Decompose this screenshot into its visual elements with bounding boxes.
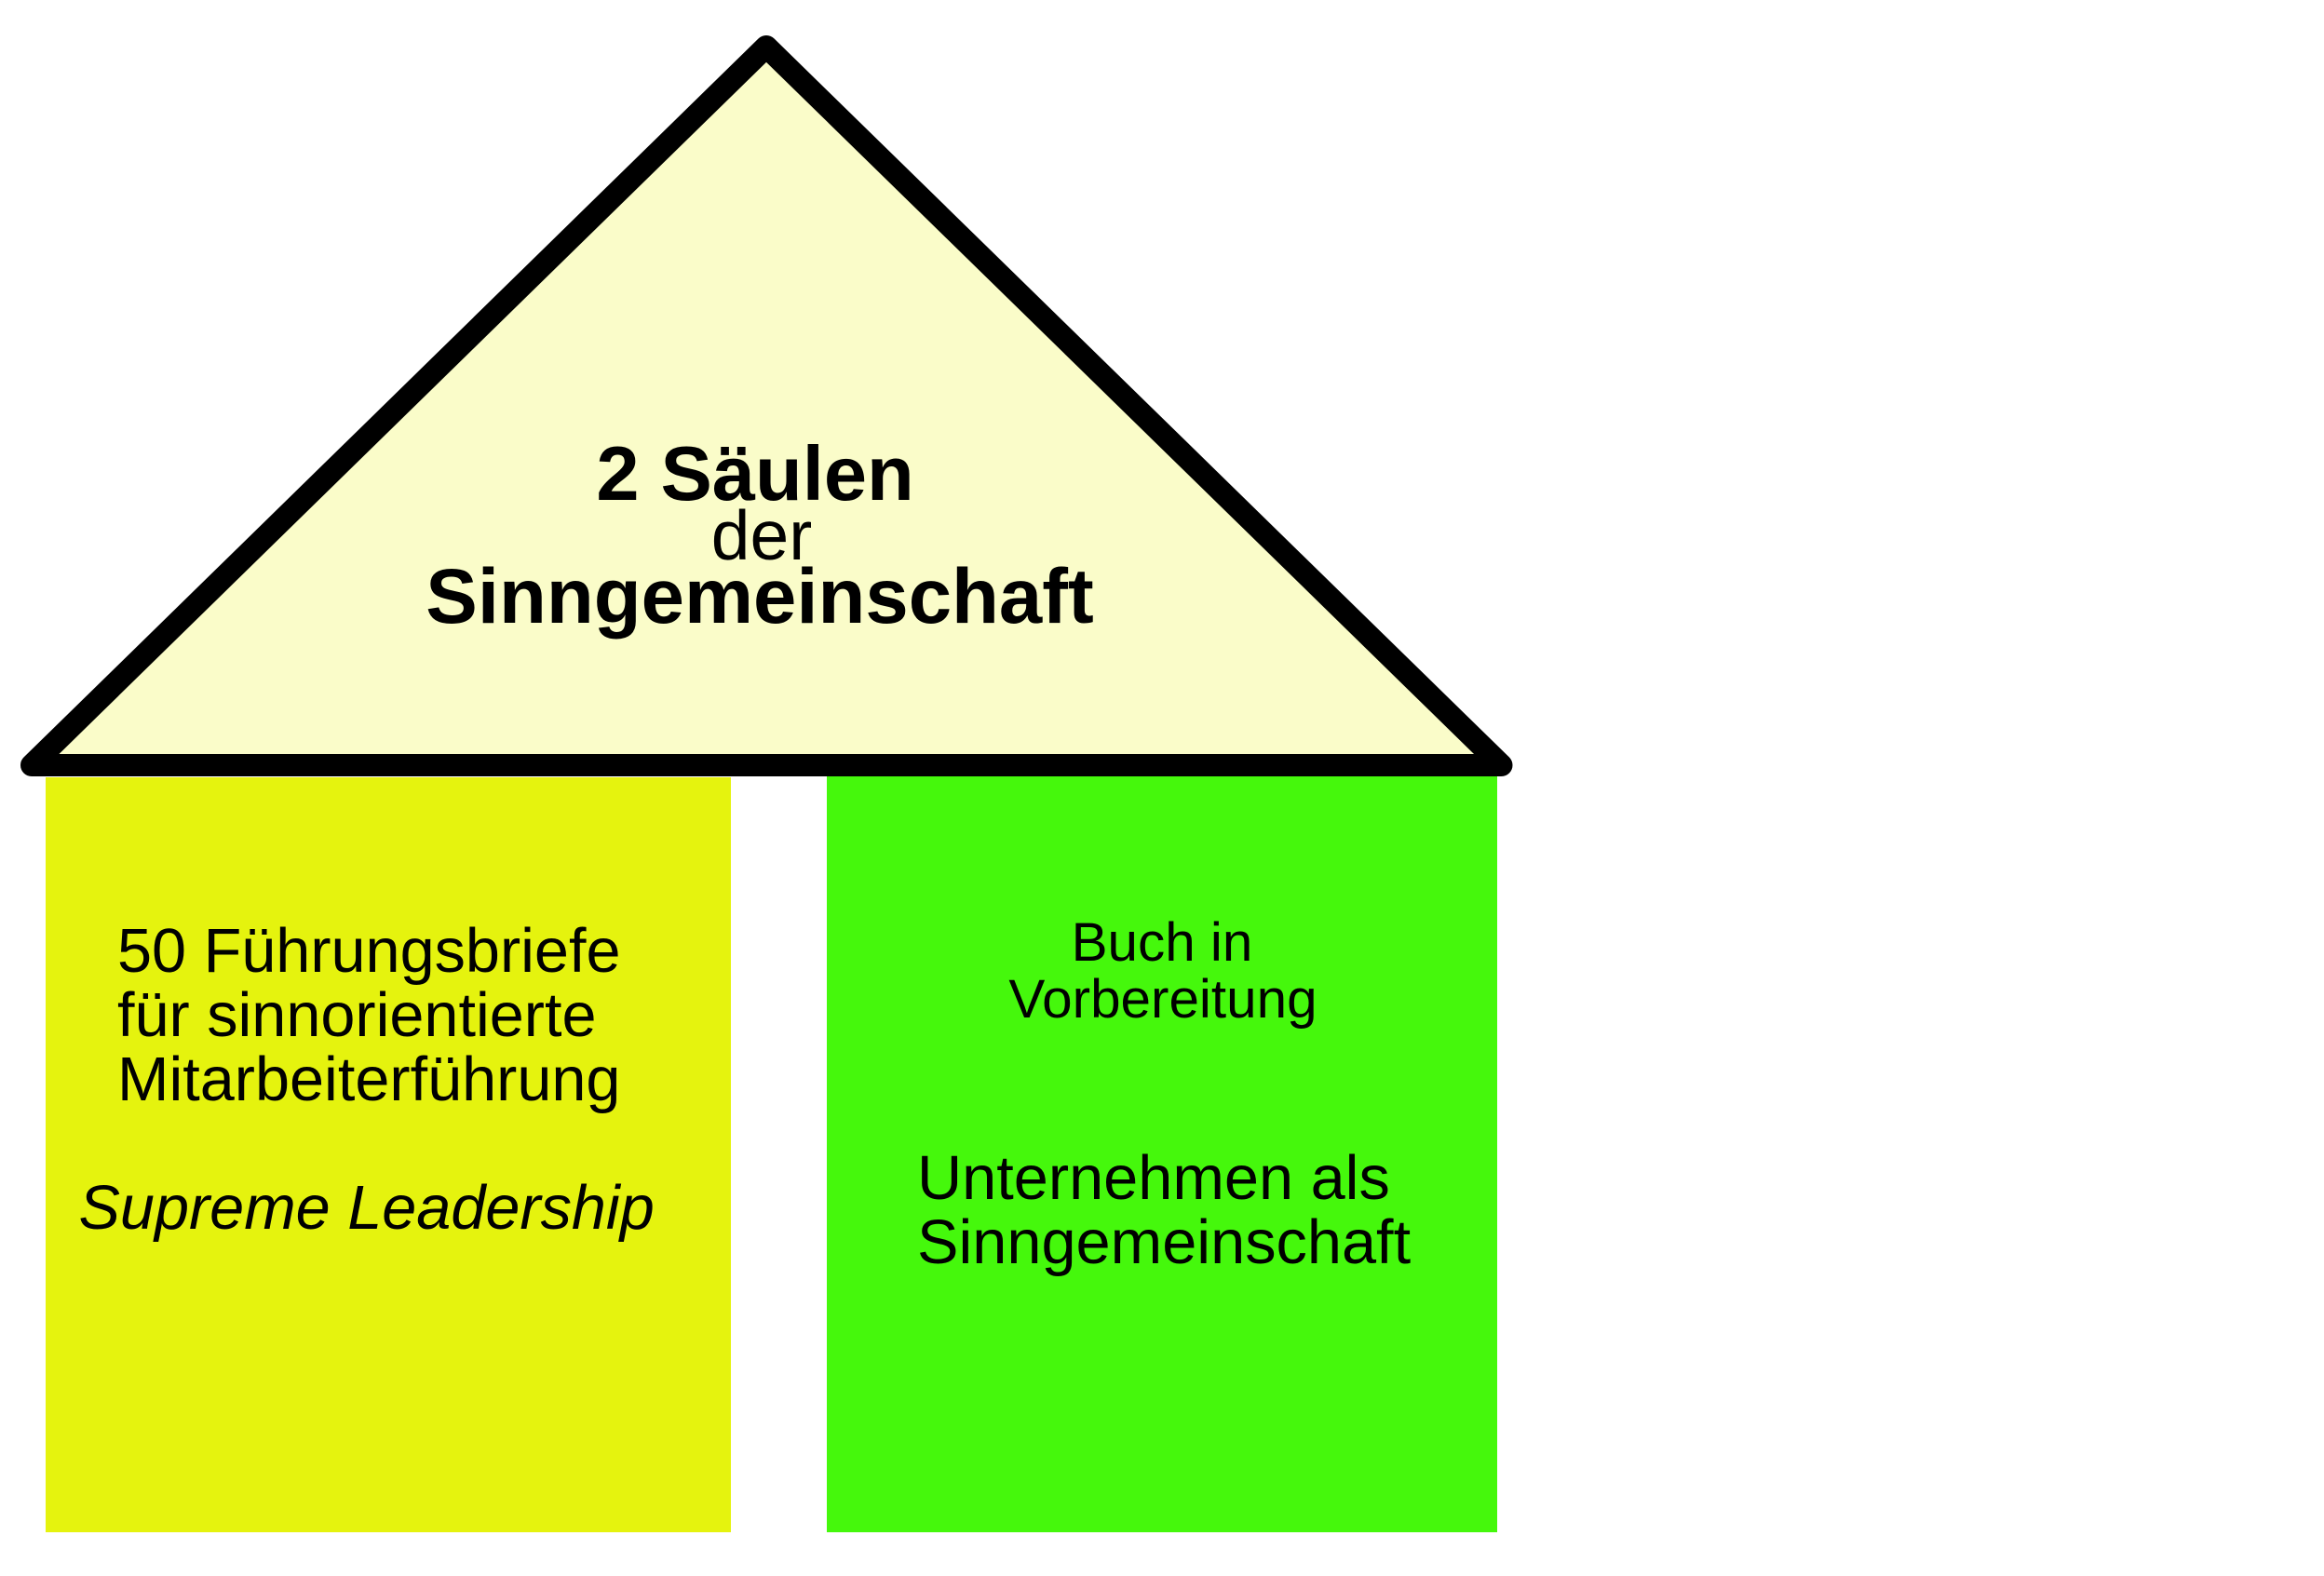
roof: triangle with title [32,47,1501,765]
title: der: der [711,496,812,574]
text: Unternehmen als Sinngemeinschaft [917,1144,1412,1277]
text: 50 Führungsbriefe description [117,917,620,1114]
text: Unternehmen als Sinngemeinschaft: Unternehmen als [917,1144,1390,1213]
title: Sinngemeinschaft: Sinngemeinschaft [426,553,1094,640]
text: Supreme Leadership: Supreme Leadership [78,1174,655,1243]
pillar: left, Führungsbriefe [46,777,731,1532]
title: 2 Säulen: 2 Säulen [596,430,914,517]
pillar: right, Buch in Vorbereitung [827,775,1497,1532]
text: 50 Führungsbriefe description: 50 Führungsbriefe [117,917,620,986]
text: 50 Führungsbriefe description: Mitarbeiterführung [117,1045,620,1114]
text: Buch in Vorbereitung: Buch in [1072,912,1252,973]
text: Buch in Vorbereitung: Vorbereitung [1008,969,1317,1030]
text: Unternehmen als Sinngemeinschaft: Sinngemeinschaft [917,1208,1412,1277]
text: 50 Führungsbriefe description: für sinnorientierte [117,981,597,1050]
text: Buch in Vorbereitung [1008,912,1317,1030]
